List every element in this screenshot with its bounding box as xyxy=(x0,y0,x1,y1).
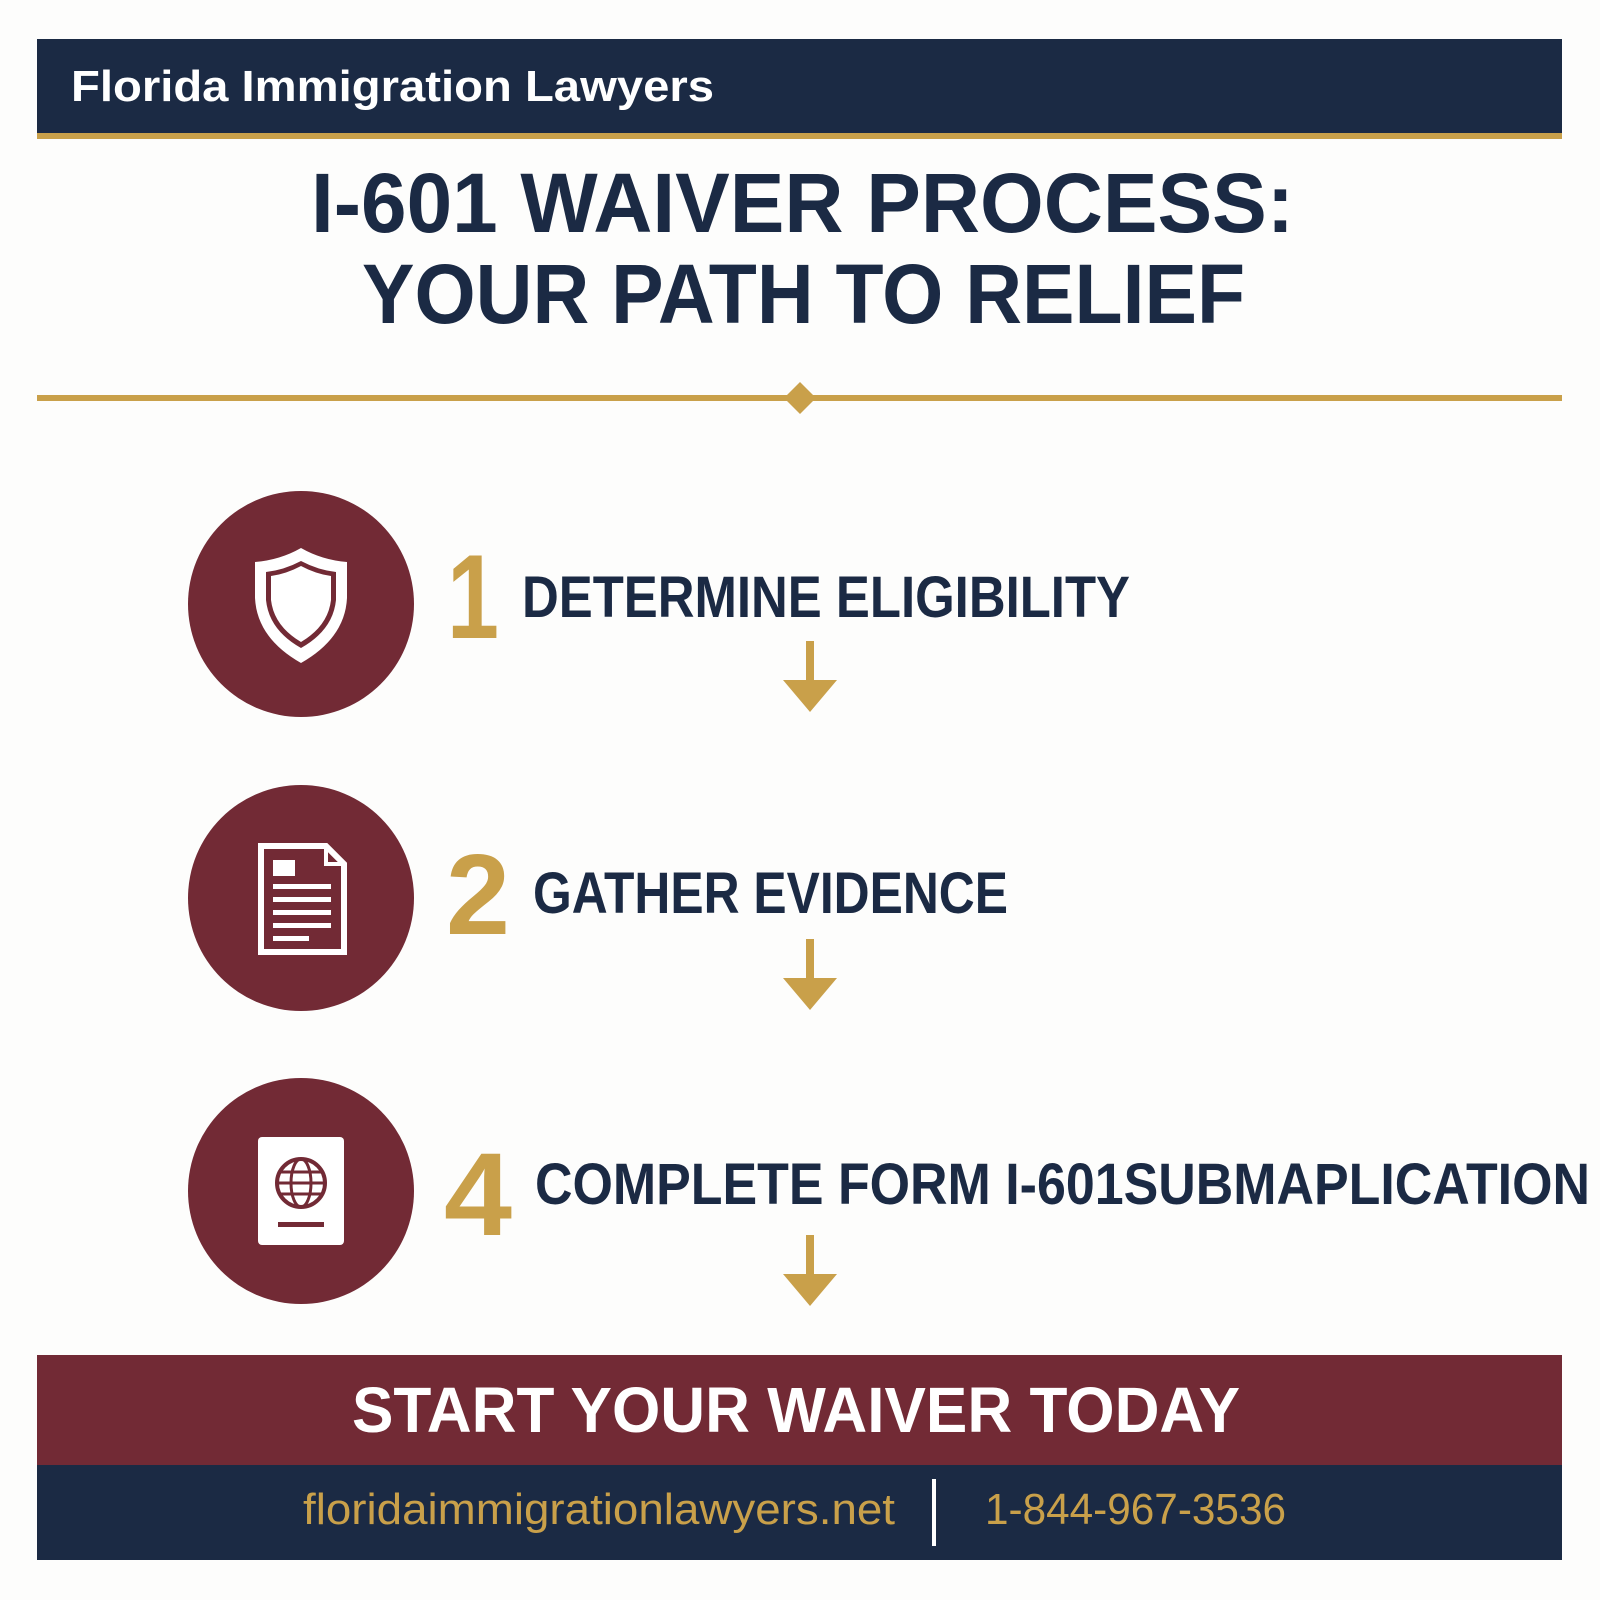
title: YOUR PATH TO RELIEF xyxy=(362,247,1245,341)
arrow 3 xyxy=(783,1235,837,1306)
step 2 xyxy=(188,785,1008,1011)
header bar xyxy=(37,39,1562,139)
phone: 1-844-967-3536 xyxy=(985,1485,1286,1534)
arrow 2 xyxy=(783,939,837,1010)
icon: shield xyxy=(188,491,414,717)
number 1: 1 xyxy=(447,530,499,664)
icon: document xyxy=(188,785,414,1011)
number 4: 4 xyxy=(444,1129,512,1261)
number 2: 2 xyxy=(446,832,510,959)
CTA banner: START YOUR WAIVER TODAY xyxy=(352,1374,1240,1446)
step 2 label: GATHER EVIDENCE xyxy=(533,861,1008,926)
step 3 xyxy=(188,1078,1590,1304)
gold divider with diamond xyxy=(37,382,1562,414)
header text: Florida Immigration Lawyers xyxy=(71,62,714,111)
icon: passport xyxy=(188,1078,414,1304)
website: floridaimmigrationlawyers.net xyxy=(303,1485,895,1534)
CTA banner xyxy=(37,1355,1562,1465)
step 1 xyxy=(188,491,1130,717)
title xyxy=(311,156,1294,341)
arrow 1 xyxy=(783,641,837,712)
step 1 label: DETERMINE ELIGIBILITY xyxy=(522,565,1130,630)
footer contact bar xyxy=(37,1465,1562,1560)
title: I-601 WAIVER PROCESS: xyxy=(311,156,1294,250)
